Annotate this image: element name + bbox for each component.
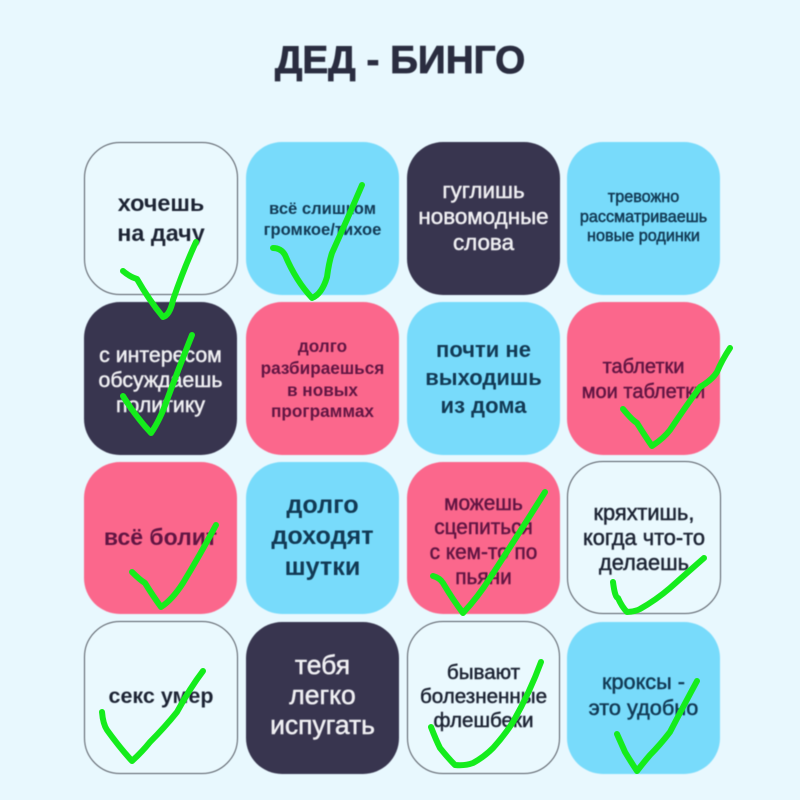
card: гуглишь новомодные слова: новомодные: [418, 204, 549, 228]
card: долго разбираешься в новых программах: программах: [271, 401, 374, 421]
card: кряхтишь, когда что-то делаешь: делаешь: [599, 550, 689, 575]
card: тебя легко испугать: испугать: [270, 710, 375, 740]
card: всё слишком громкое/тихое: громкое/тихое: [264, 220, 381, 238]
card: долго разбираешься в новых программах: в новых: [287, 380, 358, 400]
card: хочешь на дачу: хочешь: [118, 190, 204, 216]
check mark 8: [102, 671, 203, 761]
card: можешь сцепиться с кем-то по пьяни: [407, 462, 560, 614]
card: можешь сцепиться с кем-то по пьяни: можешь: [444, 492, 523, 515]
card: кроксы - это удобно: кроксы -: [602, 669, 685, 694]
card: почти не выходишь из дома: из дома: [441, 392, 526, 418]
bingo grid: [83, 141, 722, 775]
card: долго разбираешься в новых программах: долго: [298, 336, 347, 356]
card: секс умер: секс умер: [108, 684, 214, 708]
card: кроксы - это удобно: [567, 622, 720, 774]
card: секс умер: [84, 621, 238, 774]
card: тревожно рассматриваешь новые родинки: [567, 142, 720, 295]
card: можешь сцепиться с кем-то по пьяни: пьяни: [455, 566, 512, 589]
card: почти не выходишь из дома: почти не: [436, 336, 531, 362]
card: гуглишь новомодные слова: [407, 142, 560, 295]
card: долго доходят шутки: шутки: [285, 552, 360, 580]
card: кроксы - это удобно: это удобно: [589, 695, 698, 720]
card: долго доходят шутки: долго: [286, 490, 359, 518]
card: бывают болезненные флешбеки: бывают: [447, 660, 520, 684]
check mark 5: [132, 525, 216, 607]
card: всё болит: [84, 462, 237, 614]
card: всё болит: всё болит: [104, 524, 217, 550]
card: долго разбираешься в новых программах: разбираешься: [261, 358, 384, 378]
check mark 4: [623, 348, 730, 446]
check mark 9: [431, 662, 541, 765]
card: тебя легко испугать: тебя: [295, 650, 350, 680]
card: с интересом обсуждаешь политику: политику: [116, 393, 205, 417]
card: можешь сцепиться с кем-то по пьяни: сцепиться: [434, 516, 533, 539]
title: ДЕД - БИНГО: [275, 39, 525, 82]
card: хочешь на дачу: [84, 142, 238, 295]
card: с интересом обсуждаешь политику: обсуждаешь: [99, 368, 222, 392]
check mark 10: [617, 681, 697, 771]
card: бывают болезненные флешбеки: болезненные: [420, 684, 547, 708]
card: таблетки мои таблетки: мои таблетки: [582, 380, 705, 402]
card: с интересом обсуждаешь политику: с интересом: [99, 343, 222, 367]
card: таблетки мои таблетки: таблетки: [603, 356, 684, 378]
card: таблетки мои таблетки: [567, 302, 720, 455]
card: бывают болезненные флешбеки: [407, 621, 560, 774]
card: хочешь на дачу: на дачу: [117, 220, 205, 246]
check mark 1: [123, 242, 196, 317]
card: почти не выходишь из дома: выходишь: [425, 364, 542, 390]
check mark 6: [433, 492, 545, 613]
card: долго доходят шутки: [246, 462, 399, 614]
card: тревожно рассматриваешь новые родинки: рассматриваешь: [580, 208, 707, 226]
card: гуглишь новомодные слова: гуглишь: [442, 178, 525, 202]
card: всё слишком громкое/тихое: всё слишком: [269, 198, 376, 218]
card: можешь сцепиться с кем-то по пьяни: с кем-то по: [430, 541, 537, 564]
card: тебя легко испугать: легко: [289, 680, 356, 710]
check mark 2: [273, 185, 362, 298]
card: почти не выходишь из дома: [407, 302, 560, 455]
card: долго доходят шутки: доходят: [271, 522, 374, 550]
check mark 7: [613, 558, 704, 612]
card: кряхтишь, когда что-то делаешь: [567, 461, 721, 614]
card: бывают болезненные флешбеки: флешбеки: [433, 708, 534, 732]
card: всё слишком громкое/тихое: [246, 142, 399, 295]
card: тревожно рассматриваешь новые родинки: тревожно: [608, 188, 679, 206]
card: тревожно рассматриваешь новые родинки: новые родинки: [587, 227, 700, 245]
card: кряхтишь, когда что-то делаешь: кряхтишь,: [594, 500, 694, 525]
card: гуглишь новомодные слова: слова: [453, 230, 514, 254]
card: долго разбираешься в новых программах: [246, 302, 399, 455]
card: тебя легко испугать: [246, 622, 399, 774]
check mark 3: [123, 335, 192, 433]
card: с интересом обсуждаешь политику: [84, 302, 237, 455]
card: кряхтишь, когда что-то делаешь: когда что-то: [583, 525, 705, 550]
